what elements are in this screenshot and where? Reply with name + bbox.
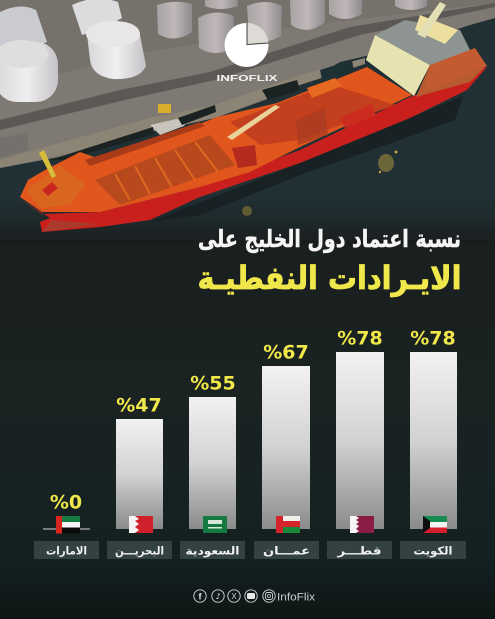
- label: UAE: الامارات: [46, 544, 87, 558]
- title: [198, 225, 462, 297]
- superstructure: [366, 2, 487, 97]
- bar: Qatar: [336, 328, 384, 529]
- deck tank and crane: [307, 78, 342, 98]
- logo pie icon: [224, 23, 268, 67]
- label: UAE: [34, 541, 99, 559]
- ship deck: [20, 67, 412, 212]
- label: Bahrain: البحريـــن: [115, 544, 164, 558]
- quay land: [0, 0, 495, 168]
- label: Oman: [254, 541, 319, 559]
- flags: [56, 516, 447, 534]
- white storage tanks: [0, 0, 146, 102]
- logo: InfoFlix: [216, 23, 279, 83]
- cargo deck ribs: [115, 142, 218, 200]
- bar: UAE: %0: [50, 492, 82, 514]
- icon: X: X: [231, 592, 237, 601]
- handle text: InfoFlix: [277, 592, 316, 604]
- label: Qatar: [327, 541, 392, 559]
- icon: facebook: f: [198, 592, 202, 602]
- flag: Kuwait: [423, 516, 447, 533]
- bar: Bahrain: [116, 394, 163, 529]
- flag: Qatar: [350, 516, 374, 533]
- label: Kuwait: [400, 541, 466, 559]
- bar: Oman: %67: [263, 342, 309, 364]
- label: Qatar: قطـــر: [336, 544, 382, 558]
- grey storage tanks: [157, 0, 427, 53]
- water: [0, 0, 495, 240]
- title line 2: الايـرادات النفطيـة: [198, 259, 462, 297]
- bar: UAE: [43, 492, 90, 530]
- photo: oil tanker at terminal: [0, 0, 495, 245]
- bar chart: [43, 328, 457, 530]
- icon: tiktok: ♪: [215, 592, 221, 601]
- bar: Bahrain: %47: [116, 394, 162, 416]
- yellow equipment: [158, 104, 171, 113]
- icon: instagram: [263, 590, 275, 602]
- bar: Saudi Arabia: %55: [190, 372, 236, 394]
- bar: Qatar: %78: [337, 328, 383, 350]
- ship hull: [20, 67, 487, 232]
- label: Kuwait: الكويت: [414, 544, 452, 558]
- label: Saudi Arabia: [180, 541, 245, 559]
- bow detail: [39, 150, 56, 178]
- flag: Saudi Arabia: [203, 516, 227, 533]
- flag: UAE: [56, 516, 80, 534]
- label: Saudi Arabia: السعودية: [186, 544, 240, 558]
- flag: Oman: [276, 516, 300, 533]
- dark channel: [50, 127, 154, 160]
- logo wordmark: INFOFLIX: [216, 74, 279, 83]
- bar: Oman: [262, 342, 310, 529]
- water glints: [242, 150, 398, 216]
- bar: Saudi Arabia: [189, 372, 236, 529]
- country labels: [34, 541, 466, 559]
- flag: Bahrain: [129, 516, 153, 533]
- label: Bahrain: [107, 541, 172, 559]
- bar: Kuwait: %78: [410, 328, 456, 350]
- label: Oman: عمـــان: [263, 544, 310, 558]
- ship reflection: [150, 96, 463, 222]
- icon: youtube: [245, 590, 257, 602]
- footer social handles: [194, 590, 316, 604]
- rocky shore: [0, 58, 365, 168]
- bar: Kuwait: [410, 328, 457, 529]
